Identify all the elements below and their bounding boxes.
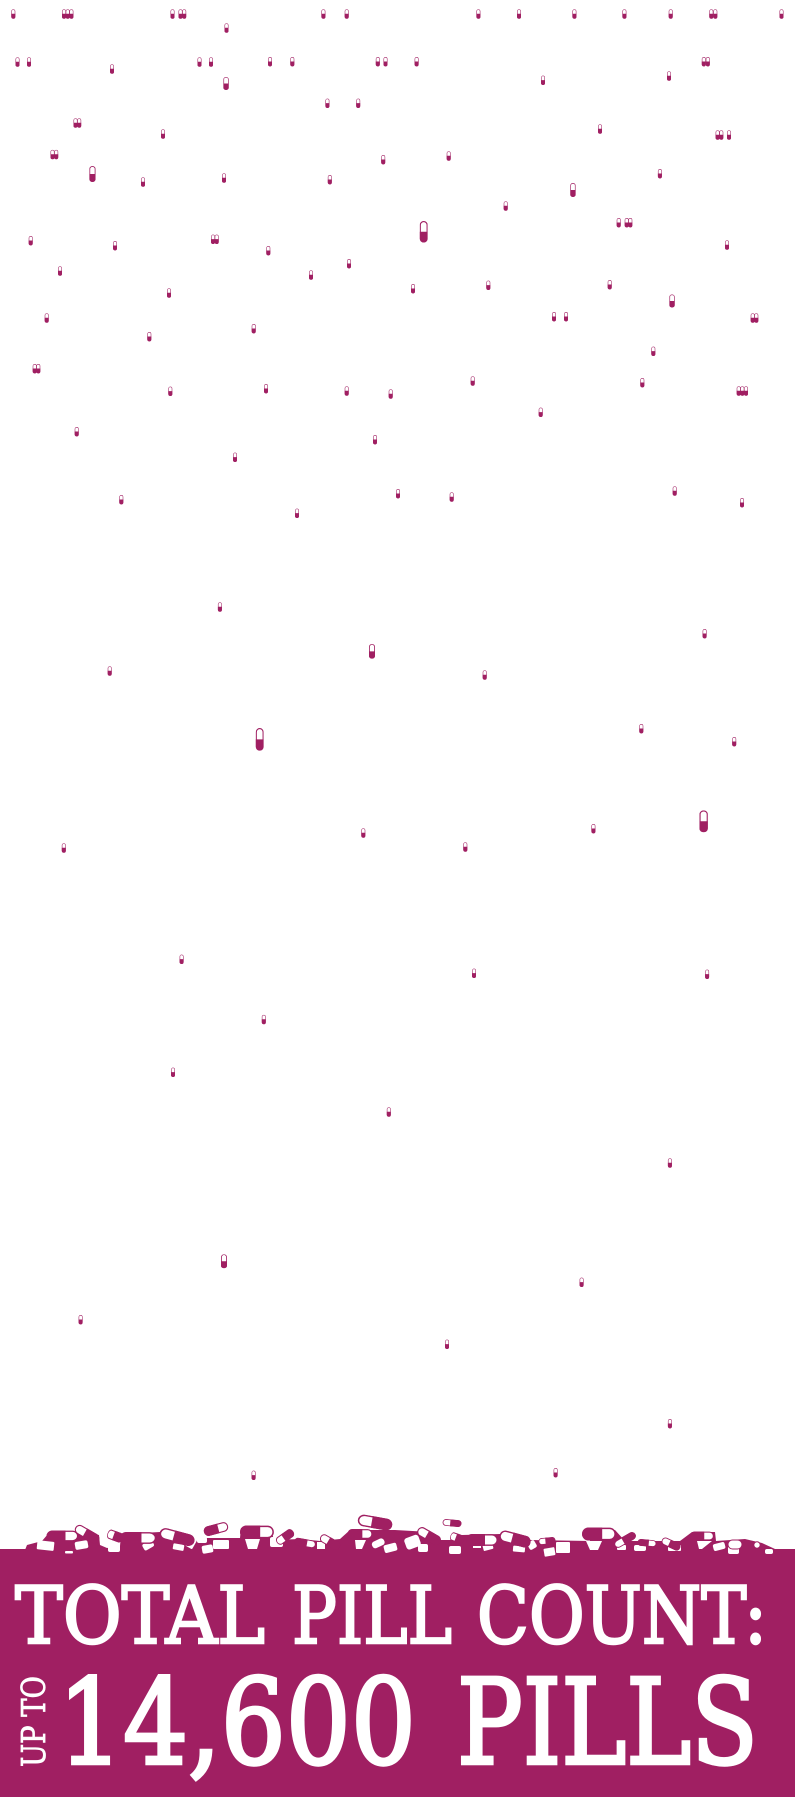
label: up to: UP TO: [14, 1676, 53, 1767]
heading: total pill count: [15, 1570, 767, 1662]
capsules, left of the pile: [46, 1521, 273, 1547]
headline number: 14,600 pills: [58, 1654, 758, 1792]
falling pills, top band: [11, 10, 784, 197]
heading: total pill count: TOTAL: [15, 1570, 265, 1662]
heading: total pill count: PILL: [292, 1570, 452, 1662]
capsules, right of the pile: [499, 1528, 760, 1552]
headline number: 14,600 pills: 14,600: [58, 1654, 416, 1792]
loose white capsule pieces: [37, 1534, 773, 1557]
banner: [0, 1549, 795, 1797]
pile silhouette: [25, 1526, 775, 1560]
falling pills, upper middle band: [29, 202, 758, 518]
pile of pills: [25, 1514, 775, 1560]
falling pills, bottom band: [79, 1015, 672, 1480]
falling pills, lower middle band: [62, 603, 736, 979]
capsules, middle of the pile: [275, 1514, 497, 1551]
